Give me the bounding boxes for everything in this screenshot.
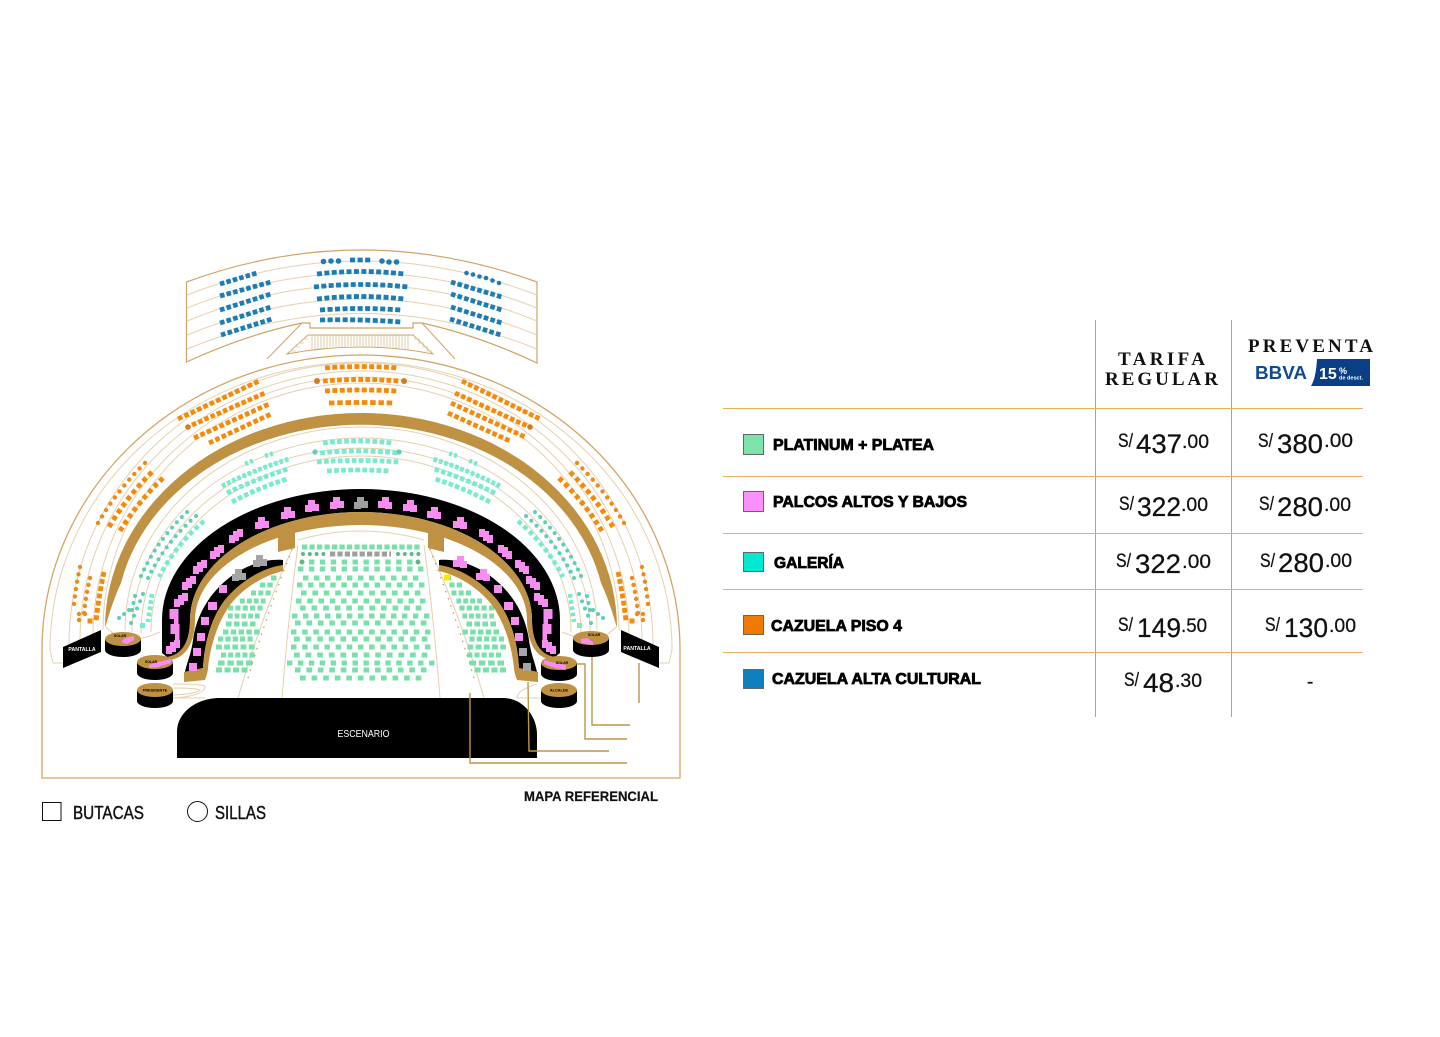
disc: left upper: SOLAR	[114, 634, 127, 638]
row: palcos altos y bajos: .00	[1181, 495, 1208, 516]
caption: mapa referencial: MAPA REFERENCIAL	[524, 788, 658, 804]
badge: 15% de descuento: 15	[1319, 366, 1337, 383]
row: galeria: 322	[1135, 549, 1181, 579]
row: cazuela alta cultural	[744, 668, 1313, 698]
logo: BBVA: BBVA	[1255, 363, 1307, 383]
row: cazuela alta cultural: -	[1307, 672, 1313, 693]
disc: alcalde	[541, 683, 577, 708]
seats right	[450, 271, 502, 335]
disc: presidente: PRESIDENTE	[143, 688, 168, 692]
palcos altos boxes	[166, 497, 556, 654]
panel: cazuela alta frame	[186, 250, 537, 363]
row: platinum + platea: S/	[1258, 431, 1274, 452]
disc: right middle	[541, 656, 577, 681]
price table	[723, 320, 1373, 717]
row: cazuela alta cultural: CAZUELA ALTA CULTURAL	[772, 671, 981, 688]
disc: right upper	[573, 631, 609, 657]
panel: palcos bajos right	[439, 556, 538, 682]
row: palcos altos y bajos: .00	[1324, 495, 1351, 516]
orange side seats	[74, 463, 163, 624]
seats left	[220, 273, 272, 335]
leader lines	[470, 657, 639, 763]
panel: cazuela alta seats	[220, 258, 502, 335]
disc: alcalde: ALCALDE	[550, 688, 569, 692]
row: platinum + platea	[744, 429, 1353, 459]
panel: gold balcony band	[105, 413, 617, 628]
panel: palcos altos band	[162, 489, 560, 660]
row: cazuela piso 4: .50	[1181, 616, 1207, 637]
header: tarifa regular: TARIFA	[1118, 349, 1205, 370]
disc: left middle	[137, 655, 173, 680]
row: cazuela piso 4: .00	[1329, 616, 1356, 637]
row: palcos altos y bajos: S/	[1119, 494, 1135, 515]
row: galeria: S/	[1260, 551, 1276, 572]
screen labels: PANTALLA	[623, 646, 651, 652]
row: palcos altos y bajos	[744, 492, 1351, 522]
disc: left middle: SOLAR	[145, 660, 158, 664]
pantalla	[63, 630, 101, 668]
row: cazuela piso 4: S/	[1265, 615, 1281, 636]
stairs	[267, 323, 455, 359]
row: galeria: 280	[1278, 548, 1324, 578]
seats center	[314, 258, 408, 322]
row: cazuela piso 4: CAZUELA PISO 4	[771, 618, 902, 635]
row: cazuela alta cultural: S/	[1124, 670, 1140, 691]
disc: left upper	[105, 632, 141, 657]
yellow seat	[444, 574, 450, 580]
row: galeria: .00	[1325, 551, 1352, 572]
header: preventa: PREVENTA	[1248, 336, 1373, 357]
galeria side seats	[119, 454, 289, 628]
screen labels: PANTALLA	[68, 647, 96, 653]
seating map	[42, 250, 680, 778]
legend: sillas	[188, 802, 266, 823]
row: cazuela piso 4: 130	[1284, 613, 1328, 643]
stage	[177, 698, 537, 758]
row: galeria	[744, 548, 1352, 579]
stage: ESCENARIO	[338, 728, 390, 740]
badge: 15% de descuento	[1311, 359, 1370, 386]
badge: 15% de descuento: %	[1339, 366, 1347, 376]
panel: galeria center seats	[312, 441, 402, 471]
panel: cazuela piso 4 seats	[178, 366, 540, 443]
panel: left side seats	[63, 454, 293, 678]
header: tarifa regular: REGULAR	[1105, 369, 1218, 390]
panel: palcos bajos left	[184, 555, 283, 682]
row: palcos altos y bajos: 280	[1277, 492, 1323, 522]
disc: right upper: SOLAR	[588, 633, 601, 637]
header: tarifa regular	[1105, 349, 1218, 390]
panel: right side seats	[429, 454, 659, 678]
legend: butacas: BUTACAS	[73, 803, 144, 823]
row: cazuela piso 4: S/	[1118, 615, 1134, 636]
panel: platea center block	[287, 547, 435, 678]
row: cazuela alta cultural: .30	[1175, 671, 1202, 692]
disc: right middle: SOLAR	[556, 661, 569, 665]
row: platinum + platea: S/	[1118, 431, 1134, 452]
row: galeria: GALERÍA	[774, 553, 844, 572]
row: palcos altos y bajos: 322	[1137, 492, 1181, 522]
badge: 15% de descuento: de desct.	[1339, 376, 1364, 382]
disc: presidente	[137, 683, 173, 708]
row: cazuela alta cultural: 48	[1143, 668, 1174, 698]
screen labels	[68, 646, 651, 653]
table rules	[723, 320, 1363, 717]
row: platinum + platea: PLATINUM + PLATEA	[773, 437, 934, 454]
row: platinum + platea: .00	[1182, 432, 1209, 453]
platea side block	[216, 547, 293, 678]
row: galeria: .00	[1182, 552, 1211, 573]
row: galeria: S/	[1116, 551, 1132, 572]
row: palcos altos y bajos: PALCOS ALTOS Y BAJOS	[773, 494, 967, 511]
row: palcos altos y bajos: S/	[1259, 494, 1275, 515]
row: platinum + platea: 380	[1277, 429, 1323, 459]
legend: butacas	[42, 802, 144, 823]
row: cazuela piso 4	[744, 613, 1356, 643]
panel: hall outline and row lines	[42, 355, 680, 778]
pillars	[278, 527, 444, 552]
row: platinum + platea: .00	[1324, 431, 1353, 452]
row: platinum + platea: 437	[1136, 429, 1182, 459]
legend: sillas: SILLAS	[215, 803, 266, 823]
row: cazuela piso 4: 149	[1137, 613, 1181, 643]
